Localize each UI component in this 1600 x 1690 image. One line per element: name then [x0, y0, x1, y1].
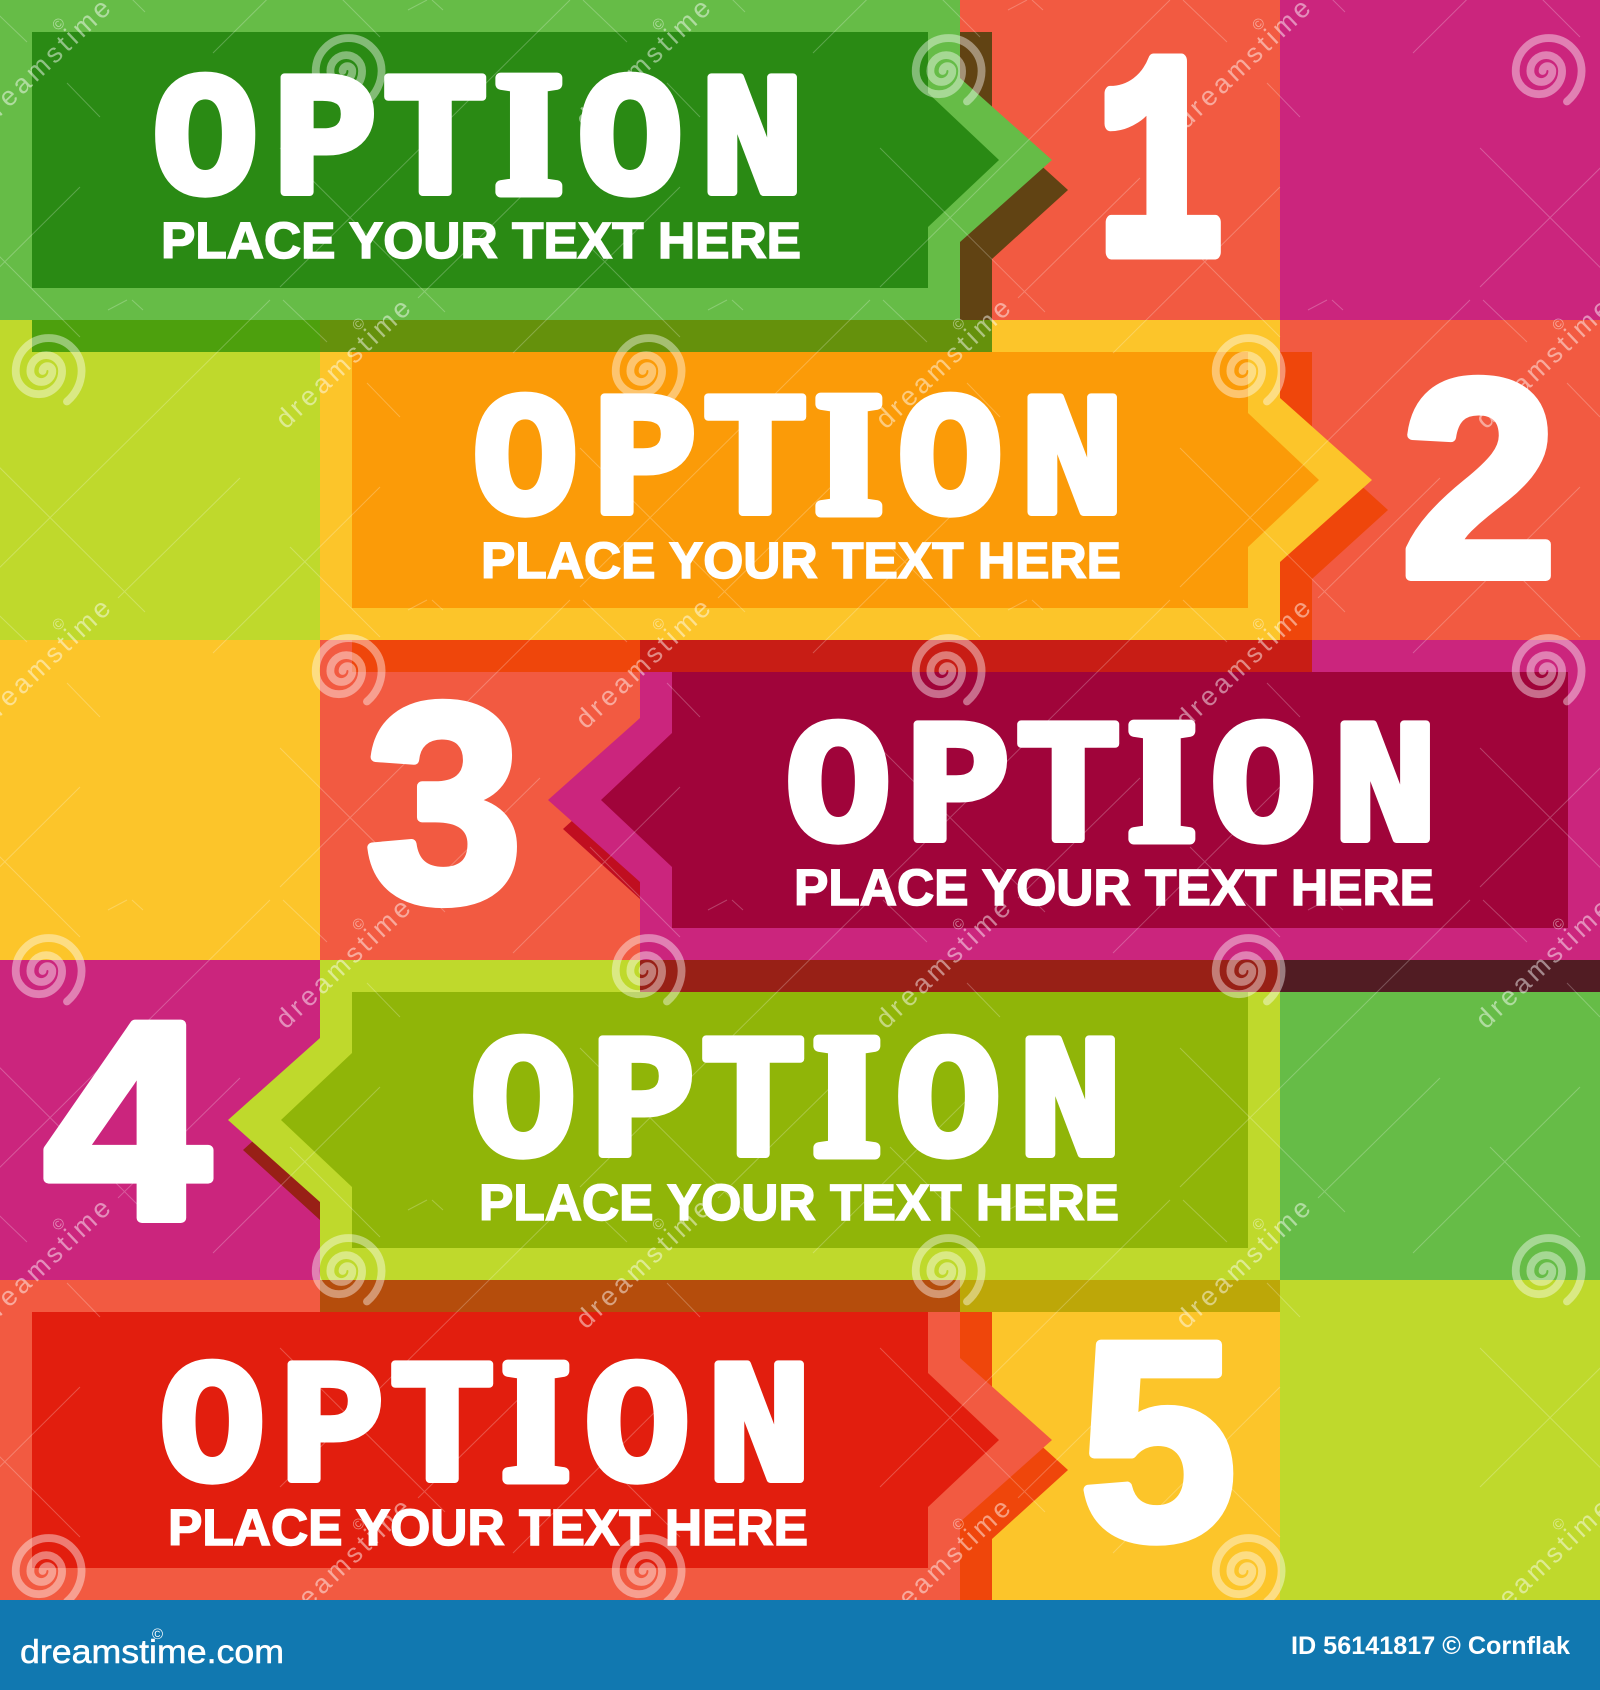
watermark text: ©: [349, 1514, 369, 1534]
watermark text: dreamstime: [269, 893, 416, 1034]
watermark text: dreamstime: [269, 1493, 416, 1634]
watermark text: ©: [1249, 14, 1269, 34]
watermark text: ©: [649, 14, 669, 34]
panel: option 3 arrow: [548, 640, 1600, 992]
number 5: 5: [1080, 1284, 1236, 1598]
watermark text: ©: [49, 14, 69, 34]
watermark text: dreamstime: [869, 893, 1016, 1034]
watermark text: dreamstime: [1169, 593, 1316, 734]
watermark text: dreamstime: [269, 293, 416, 434]
panel: option 2 arrow: [320, 320, 1388, 672]
watermark text: ©: [649, 1214, 669, 1234]
option 3 label: PLACE YOUR TEXT HERE: [794, 859, 1434, 916]
panel: option 4 arrow: [228, 960, 1280, 1312]
option 4 label: PLACE YOUR TEXT HERE: [479, 1174, 1119, 1231]
watermark text: dreamstime: [569, 593, 716, 734]
watermark text: ©: [349, 314, 369, 334]
watermark text: ©: [1549, 314, 1569, 334]
option 2 label: OPTION: [473, 357, 1124, 565]
footer bar: dreamstime.com: [20, 1633, 284, 1670]
number 2: 2: [1401, 322, 1557, 636]
option 5 label: OPTION: [160, 1324, 811, 1532]
watermark text: ©: [949, 1514, 969, 1534]
footer bar: [0, 1600, 1600, 1690]
watermark text: ©: [1249, 1214, 1269, 1234]
watermark text: dreamstime: [569, 1193, 716, 1334]
watermark text: dreamstime: [1169, 1193, 1316, 1334]
watermark text: dreamstime: [869, 293, 1016, 434]
option 4 label: OPTION: [471, 999, 1122, 1207]
watermark text: ©: [1249, 614, 1269, 634]
footer bar: ID 56141817 © Cornflak: [1291, 1632, 1570, 1660]
option 2 label: PLACE YOUR TEXT HERE: [481, 532, 1121, 589]
watermark text: ©: [1549, 914, 1569, 934]
watermark text: dreamstime: [869, 1493, 1016, 1634]
number 4: 4: [44, 965, 212, 1278]
option 1 label: PLACE YOUR TEXT HERE: [161, 212, 801, 269]
option 1 label: OPTION: [153, 37, 804, 245]
footer bar: ©: [152, 1626, 163, 1643]
watermark text: ©: [1549, 1514, 1569, 1534]
panel: option 5 arrow: [0, 1280, 1068, 1632]
option 5 label: PLACE YOUR TEXT HERE: [168, 1499, 808, 1556]
watermark text: ©: [649, 614, 669, 634]
watermark text: ©: [49, 614, 69, 634]
option 3 label: OPTION: [786, 684, 1437, 892]
number 1: 1: [1096, 11, 1224, 340]
number 3: 3: [366, 646, 522, 960]
panel: option 1 arrow: [0, 0, 1068, 352]
watermark text: ©: [49, 1214, 69, 1234]
watermark text: ©: [949, 314, 969, 334]
watermark text: ©: [349, 914, 369, 934]
watermark text: ©: [949, 914, 969, 934]
